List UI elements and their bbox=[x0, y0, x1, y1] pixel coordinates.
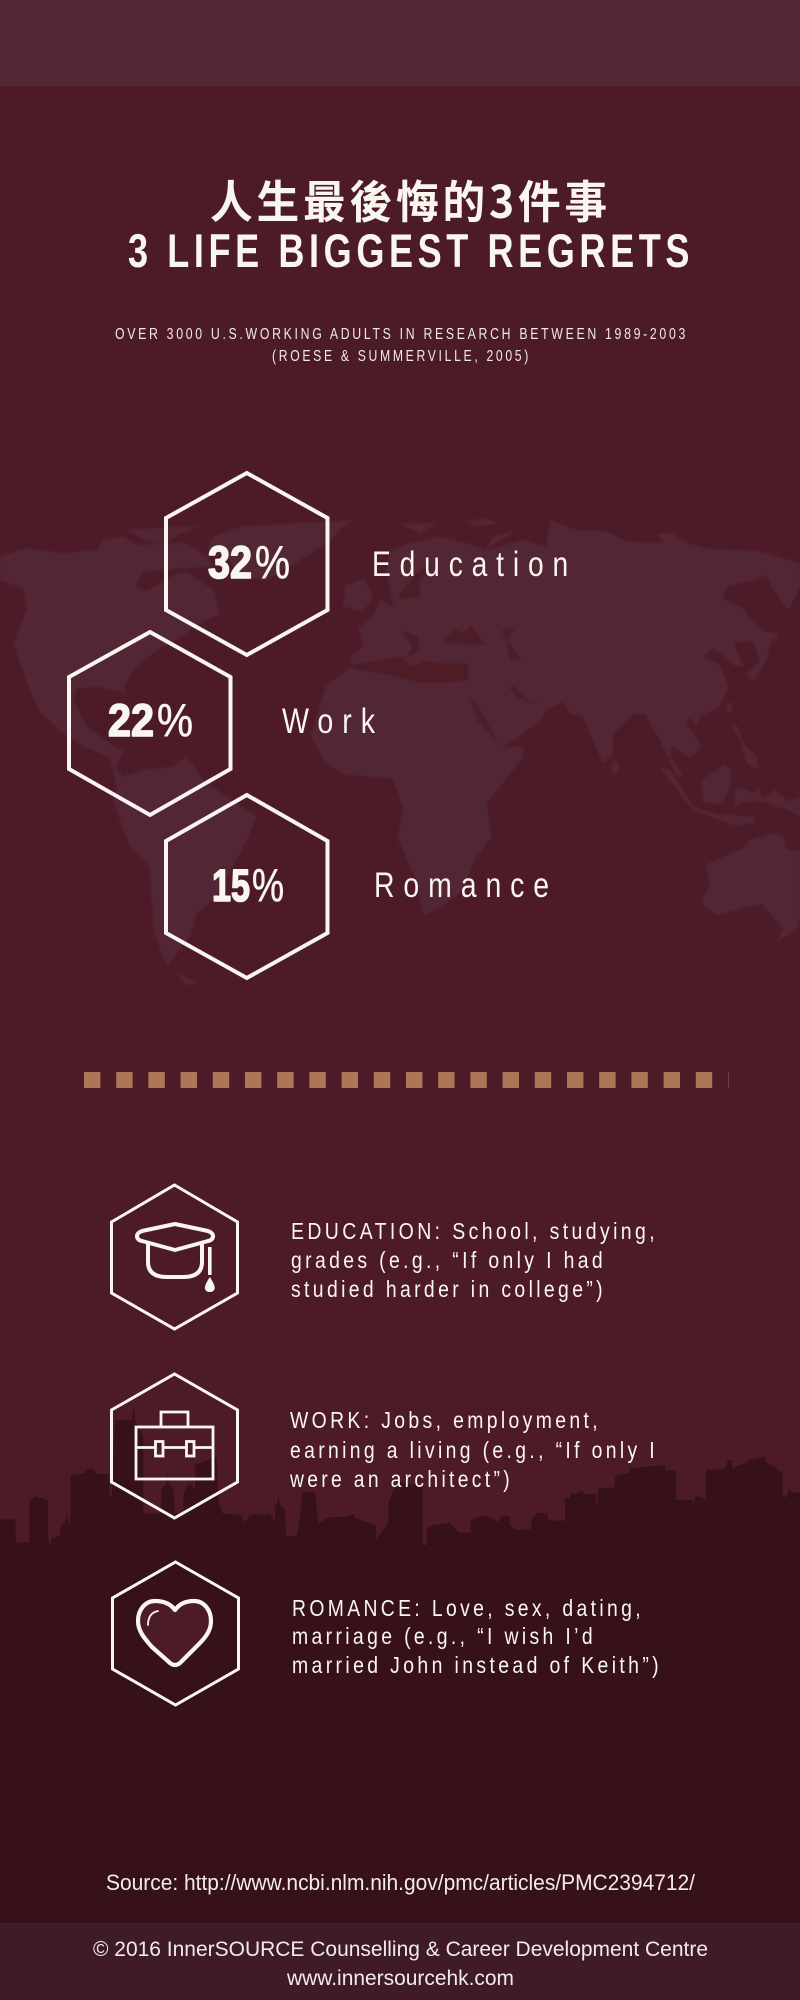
row: education bbox=[112, 1185, 658, 1329]
top band bbox=[0, 0, 800, 86]
description: work bbox=[289, 1407, 658, 1492]
label: Work: Work bbox=[282, 702, 384, 741]
dotted divider bbox=[84, 1072, 729, 1088]
description: education bbox=[291, 1218, 658, 1302]
description: education: studied harder in college”) bbox=[291, 1276, 606, 1302]
icon: heart bbox=[138, 1601, 211, 1665]
description: work: were an architect”) bbox=[289, 1466, 513, 1492]
value: 15%: % bbox=[252, 859, 284, 911]
value: 22% bbox=[108, 694, 193, 746]
hexagon: education bbox=[112, 1185, 238, 1329]
title: 人生最後悔的3件事 bbox=[210, 166, 611, 231]
icon: briefcase bbox=[136, 1412, 213, 1479]
subtitle: (ROESE & SUMMERVILLE, 2005) bbox=[272, 348, 531, 365]
footer text: © 2016 InnerSOURCE Counselling & Career Development Centre bbox=[93, 1937, 708, 1961]
label: Education: Education bbox=[372, 545, 577, 584]
label: Romance: Romance bbox=[374, 866, 558, 905]
stat: 32% Education bbox=[166, 473, 577, 655]
value: 15%: 15 bbox=[212, 860, 250, 911]
hexagon: 32% bbox=[166, 473, 328, 655]
footer text: www.innersourcehk.com bbox=[286, 1966, 514, 1990]
footer band bbox=[0, 1923, 800, 2000]
value: 22%: % bbox=[157, 694, 193, 746]
title bbox=[128, 166, 694, 277]
description: romance: ROMANCE: Love, sex, dating, bbox=[292, 1595, 644, 1621]
stat: 22% Work bbox=[69, 632, 384, 815]
footer text bbox=[93, 1937, 708, 1990]
description: education: EDUCATION: School, studying, bbox=[291, 1218, 658, 1244]
hexagon: 15% bbox=[166, 795, 328, 978]
description: romance bbox=[292, 1595, 662, 1678]
row: work bbox=[112, 1374, 658, 1518]
row: romance bbox=[112, 1562, 662, 1705]
stat: 15% Romance bbox=[166, 795, 558, 978]
value: 15% bbox=[212, 859, 284, 911]
city skyline and dark lower background bbox=[0, 1405, 800, 2000]
world map background bbox=[0, 518, 800, 985]
subtitle bbox=[115, 326, 688, 365]
icon: graduation cap bbox=[137, 1224, 215, 1292]
hexagon: 22% bbox=[69, 632, 230, 815]
description: work: earning a living (e.g., “If only I bbox=[290, 1437, 658, 1463]
description: romance: married John instead of Keith”) bbox=[292, 1652, 662, 1678]
description: work: WORK: Jobs, employment, bbox=[290, 1407, 601, 1433]
description: education: grades (e.g., “If only I had bbox=[291, 1247, 606, 1273]
value: 22%: 22 bbox=[108, 695, 154, 746]
source citation: Source: http://www.ncbi.nlm.nih.gov/pmc/articles/PMC2394712/ bbox=[106, 1870, 696, 1895]
hexagon: work bbox=[112, 1374, 238, 1518]
description: romance: marriage (e.g., “I wish I’d bbox=[292, 1623, 596, 1649]
value: 32% bbox=[208, 536, 290, 588]
hexagon: romance bbox=[112, 1562, 238, 1705]
value: 32%: % bbox=[255, 536, 290, 588]
value: 32%: 32 bbox=[208, 537, 252, 588]
